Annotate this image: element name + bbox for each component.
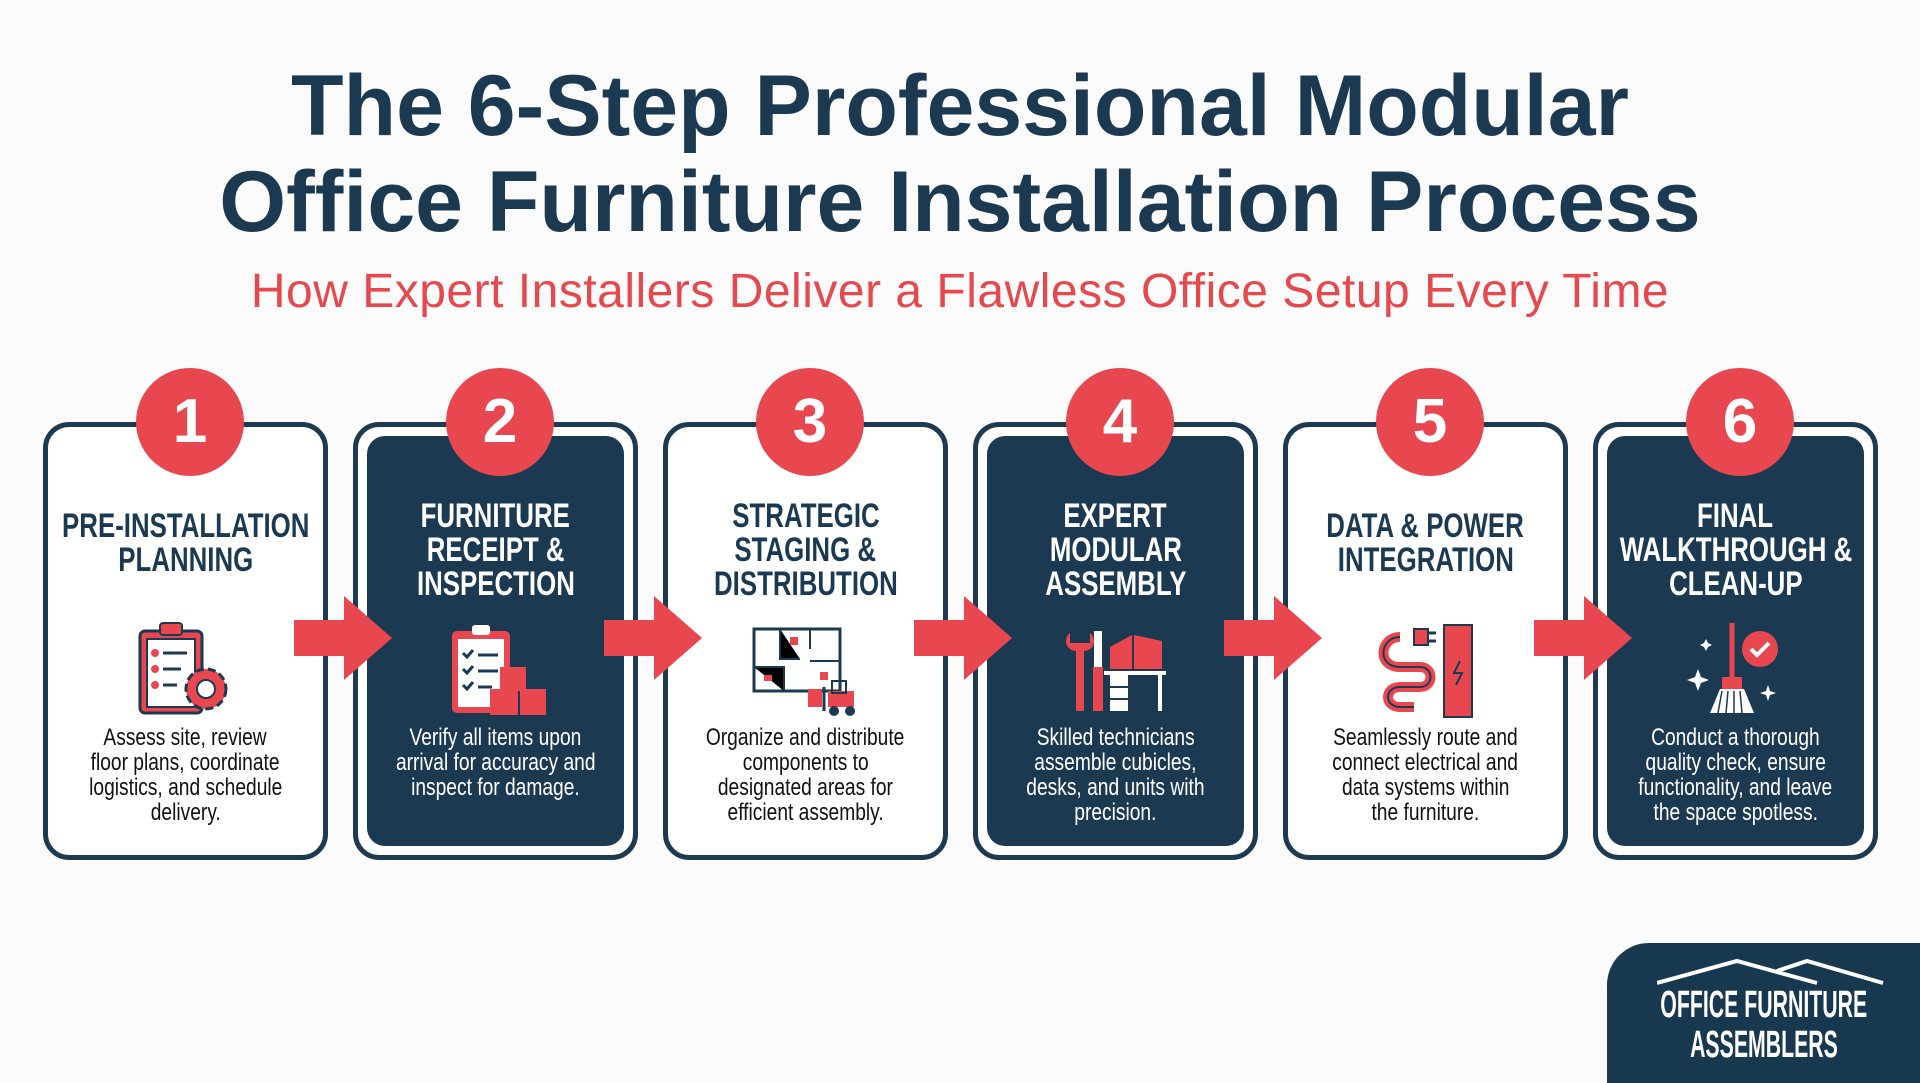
badge 4: 4	[1103, 387, 1137, 456]
card 2	[353, 422, 638, 860]
desc 4: precision.	[1074, 799, 1157, 826]
arrow 5	[1534, 596, 1632, 680]
desc 5: connect electrical and	[1333, 749, 1518, 776]
card 3	[663, 422, 948, 860]
logo text: OFFICE FURNITURE	[1660, 984, 1867, 1026]
desc 2: arrival for accuracy and	[396, 749, 595, 776]
desc 1: Assess site, review	[104, 724, 267, 751]
heading 6: CLEAN-UP	[1669, 565, 1802, 603]
desc 1: delivery.	[150, 799, 221, 826]
card 6	[1593, 422, 1878, 860]
desc 6: quality check, ensure	[1645, 749, 1826, 776]
heading 2: INSPECTION	[417, 565, 574, 603]
card 4	[973, 422, 1258, 860]
heading 4: ASSEMBLY	[1045, 565, 1186, 603]
heading 1	[62, 507, 309, 579]
title: Office Furniture Installation Process	[219, 154, 1701, 250]
heading 3: STAGING &	[735, 531, 876, 569]
desc 2: Verify all items upon	[410, 724, 581, 751]
arrow 4	[1224, 596, 1322, 680]
badge 1	[136, 368, 244, 476]
heading 6: FINAL	[1697, 497, 1774, 535]
desc 1: logistics, and schedule	[89, 774, 282, 801]
desc 5: the furniture.	[1372, 799, 1479, 826]
desc 3	[706, 724, 905, 826]
desc 4: Skilled technicians	[1037, 724, 1194, 751]
desc 2: inspect for damage.	[411, 774, 580, 801]
icon: clipboard gear	[138, 622, 228, 714]
arrow 1	[294, 596, 392, 680]
desc 4	[1026, 724, 1205, 826]
heading 3	[714, 497, 897, 603]
desc 4: desks, and units with	[1026, 774, 1205, 801]
icon: clipboard boxes	[452, 625, 546, 715]
heading 3: DISTRIBUTION	[714, 565, 897, 603]
subtitle: How Expert Installers Deliver a Flawless Office Setup Every Time	[251, 265, 1669, 318]
title	[219, 58, 1701, 250]
card 1	[43, 422, 328, 860]
desc 2	[396, 724, 595, 801]
desc 5: Seamlessly route and	[1333, 724, 1518, 751]
badge 2	[446, 368, 554, 476]
heading 2	[417, 497, 574, 603]
heading 4: EXPERT	[1064, 497, 1167, 535]
logo mark: rooflines	[1657, 958, 1884, 985]
heading 5: DATA & POWER	[1327, 507, 1524, 545]
icon: floor plan forklift	[752, 628, 855, 716]
desc 1	[89, 724, 282, 826]
desc 6: Conduct a thorough	[1651, 724, 1820, 751]
heading 1: PLANNING	[118, 541, 253, 579]
badge 4	[1066, 368, 1174, 476]
badge 1: 1	[173, 387, 207, 456]
heading 1: PRE-INSTALLATION	[62, 507, 309, 545]
heading 6: WALKTHROUGH &	[1619, 531, 1852, 569]
desc 6	[1638, 724, 1832, 826]
heading 5	[1327, 507, 1524, 579]
desc 4: assemble cubicles,	[1034, 749, 1197, 776]
heading 4: MODULAR	[1049, 531, 1182, 569]
heading 4	[1045, 497, 1186, 603]
badge 6: 6	[1723, 387, 1757, 456]
heading 2: RECEIPT &	[427, 531, 564, 569]
desc 3: components to	[743, 749, 868, 776]
icon: plug cable	[1378, 624, 1473, 718]
badge 6	[1686, 368, 1794, 476]
heading 5: INTEGRATION	[1337, 541, 1514, 579]
desc 3: designated areas for	[718, 774, 893, 801]
card 5	[1283, 422, 1568, 860]
desc 5: data systems within	[1342, 774, 1509, 801]
desc 5	[1333, 724, 1518, 826]
badge 5	[1376, 368, 1484, 476]
arrow 3	[914, 596, 1012, 680]
badge 3	[756, 368, 864, 476]
desc 3: efficient assembly.	[727, 799, 884, 826]
logo text: ASSEMBLERS	[1690, 1024, 1837, 1066]
desc 6: functionality, and leave	[1639, 774, 1832, 801]
logo text	[1660, 984, 1867, 1066]
desc 6: the space spotless.	[1653, 799, 1818, 826]
title: The 6-Step Professional Modular	[291, 58, 1629, 154]
badge 3: 3	[793, 387, 827, 456]
heading 2: FURNITURE	[421, 497, 570, 535]
logo	[1607, 943, 1920, 1083]
desc 1: floor plans, coordinate	[91, 749, 280, 776]
badge 2: 2	[483, 387, 517, 456]
icon: broom check	[1687, 623, 1778, 713]
desc 3: Organize and distribute	[706, 724, 905, 751]
badge 5: 5	[1413, 387, 1447, 456]
arrow 2	[604, 596, 702, 680]
heading 6	[1619, 497, 1852, 603]
icon: tools desk	[1066, 631, 1166, 711]
heading 3: STRATEGIC	[732, 497, 879, 535]
